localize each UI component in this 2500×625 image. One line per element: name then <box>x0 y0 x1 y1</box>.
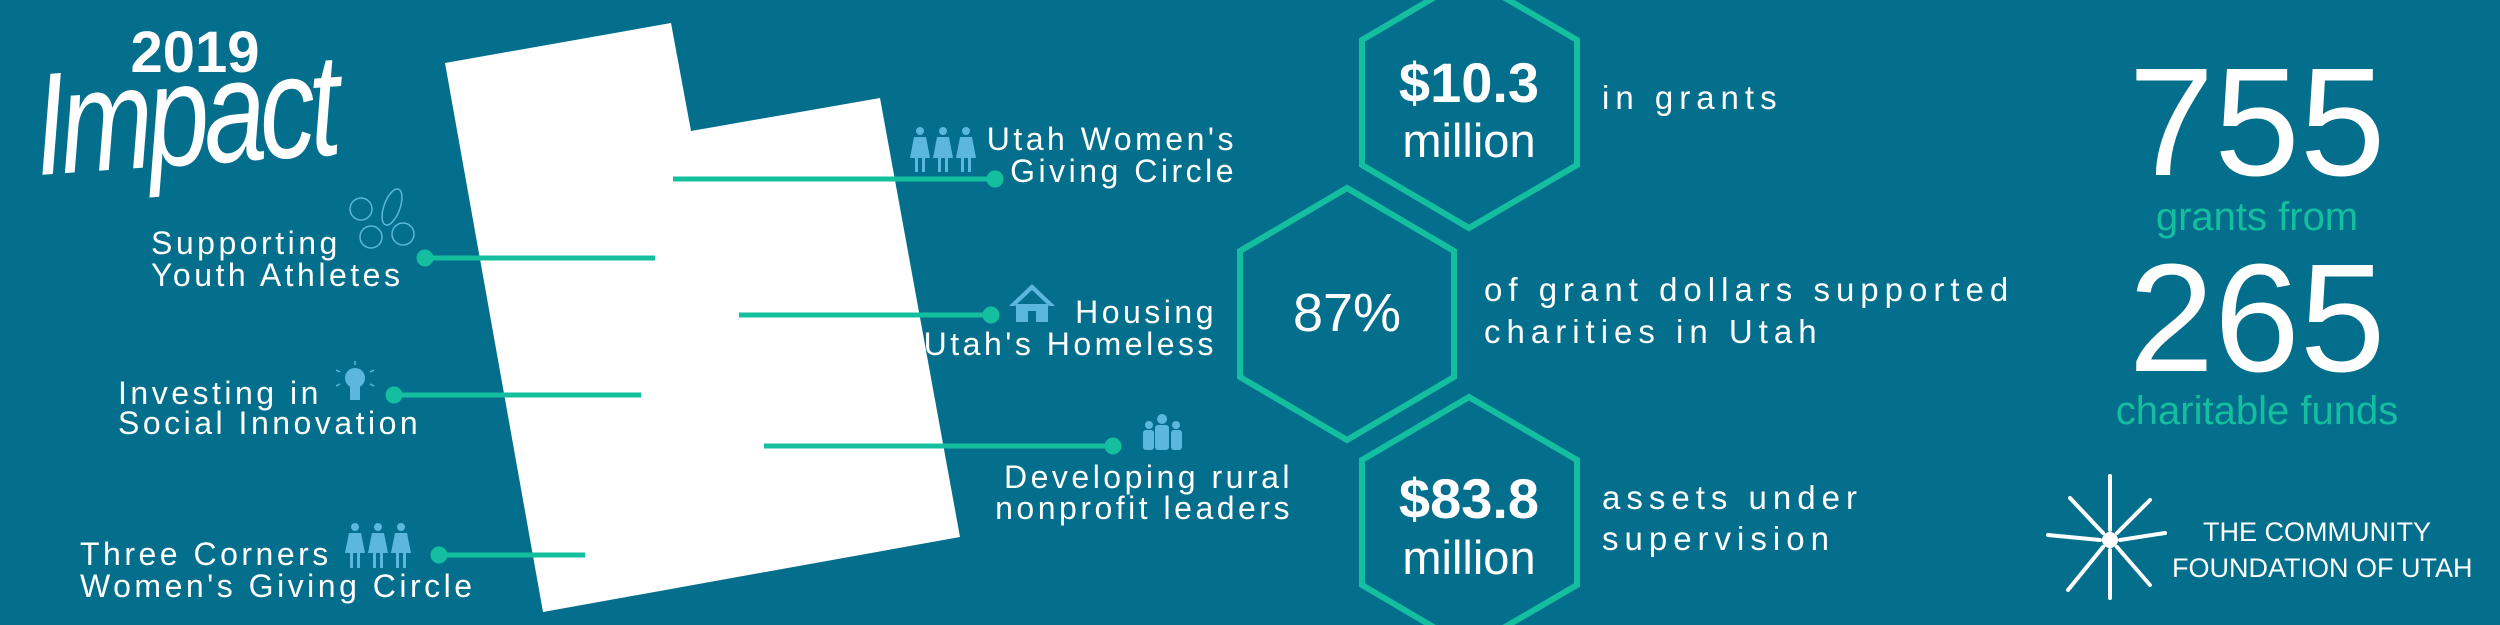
label: Supporting Youth Athletes: Supporting <box>151 225 341 261</box>
label: Developing rural nonprofit leaders: nonprofit leaders <box>995 490 1293 526</box>
text: in grants: in grants <box>1602 79 1783 116</box>
text: of grant dollars: of grant dollars supported <box>1484 271 2014 308</box>
label: Developing rural nonprofit leaders: Developing rural <box>1004 459 1293 495</box>
hexagon: 87%: 87% <box>1293 283 1401 343</box>
text: of grant dollars <box>1484 271 2014 350</box>
label: Utah Women's Giving Circle <box>987 121 1237 189</box>
hexagon: 87% <box>1240 188 1454 440</box>
icon: light bulb <box>336 361 374 400</box>
icon: group <box>1143 414 1182 450</box>
label: Investing in Social Innovation <box>118 375 421 441</box>
title: Impact: Impact <box>29 21 350 206</box>
connector lines <box>388 173 1119 561</box>
label: Utah Women's Giving Circle: Utah Women's <box>987 121 1237 157</box>
label: Housing Utah's Homeless: Utah's Homeless <box>924 326 1217 362</box>
text: of grant dollars: charities in Utah <box>1484 313 1823 350</box>
logo: star <box>2048 476 2165 598</box>
label: Supporting Youth Athletes <box>151 225 403 293</box>
hexagon: $83.8 million: $83.8 <box>1399 467 1539 530</box>
logo text: FOUNDATION OF UTAH <box>2172 553 2472 583</box>
text: assets under supervision: assets under <box>1602 479 1863 516</box>
title: 2019: 2019 <box>130 20 260 85</box>
stat: 755 grants: grants from <box>2156 195 2358 239</box>
icon: sports balls <box>350 186 414 248</box>
hexagon: $83.8 million: million <box>1402 531 1536 584</box>
logo text: THE COMMUNITY <box>2203 517 2431 547</box>
hexagon: $10.3 million: million <box>1402 114 1536 167</box>
icon: women (bottom) <box>345 523 411 568</box>
stat: 265 funds: 265 <box>2129 232 2385 404</box>
hexagon: $10.3 million: $10.3 <box>1399 51 1539 114</box>
label: Utah Women's Giving Circle: Giving Circle <box>1010 153 1237 189</box>
label: Investing in Social Innovation: Investing in <box>118 375 322 411</box>
label: Three Corners Women's Giving Circle <box>80 536 476 604</box>
label: Three Corners Women's Giving Circle: Three Corners <box>80 536 332 572</box>
text: assets under supervision: supervision <box>1602 520 1835 557</box>
label: Developing rural nonprofit leaders <box>995 459 1293 526</box>
label: Investing in Social Innovation: Social Innovation <box>118 405 421 441</box>
label: Housing Utah's Homeless: Housing <box>1075 294 1217 330</box>
label: Supporting Youth Athletes: Youth Athletes <box>151 257 403 293</box>
map: Utah <box>445 23 960 612</box>
logo text <box>2172 517 2472 583</box>
stat: 265 funds: charitable funds <box>2116 389 2398 433</box>
text: assets under supervision <box>1602 479 1863 557</box>
icon: women (top) <box>910 127 976 172</box>
stat: 755 grants: 755 <box>2129 36 2385 208</box>
hexagon: $10.3 million <box>1362 0 1577 228</box>
hexagon: $83.8 million <box>1362 397 1577 625</box>
icon: house <box>1009 284 1055 322</box>
label: Housing Utah's Homeless <box>924 294 1217 362</box>
label: Three Corners Women's Giving Circle: Women's Giving Circle <box>80 568 476 604</box>
